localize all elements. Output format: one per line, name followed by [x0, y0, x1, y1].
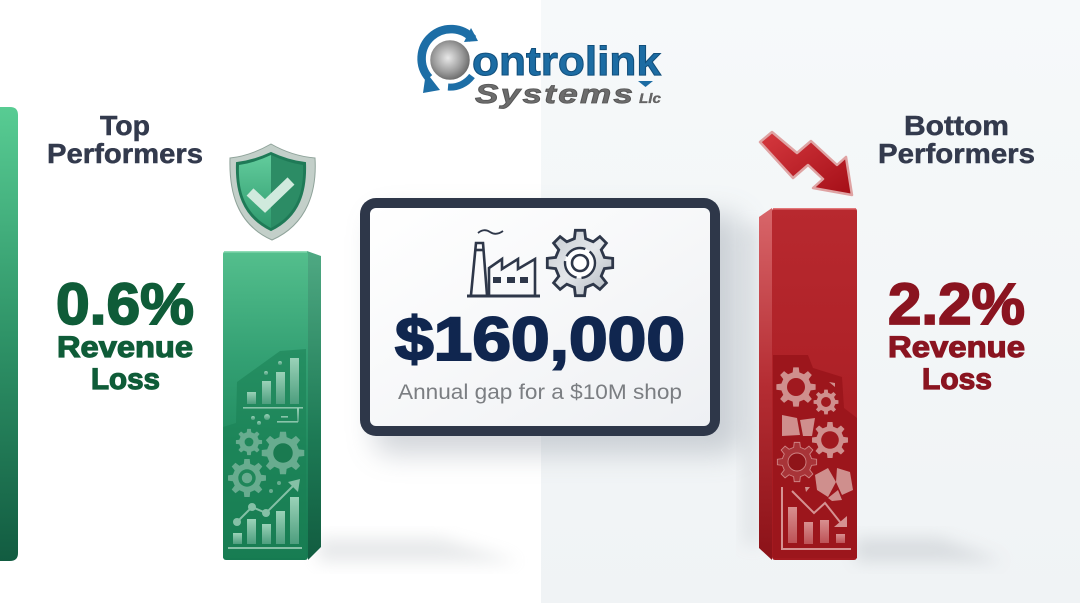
left accent stripe	[0, 107, 18, 561]
stat: 0.6% revenue loss: Loss	[91, 363, 160, 396]
heading: bottom performers	[878, 110, 1035, 169]
icon: gear	[547, 230, 613, 296]
bar front face	[772, 208, 857, 560]
card shadow	[374, 214, 742, 454]
bar side face	[759, 208, 772, 560]
upper bar chart	[243, 358, 303, 425]
bar top highlight	[773, 208, 856, 210]
icon: shield with check	[230, 144, 315, 240]
card face	[370, 208, 710, 426]
stat: 2.2% revenue loss: Revenue	[888, 331, 1025, 364]
embossed panel	[223, 349, 306, 558]
stat: 0.6% revenue loss: 0.6%	[56, 272, 194, 337]
icon: red down arrow	[760, 132, 852, 195]
falling chart	[782, 487, 851, 549]
logo wordmark: ontrolink	[472, 38, 661, 84]
heading: bottom performers: Bottom	[904, 110, 1009, 141]
floor shadow: red bar	[855, 538, 1005, 562]
logo suffix: Llc	[639, 90, 661, 106]
side shadow: red bar	[744, 225, 760, 545]
card frame	[360, 198, 720, 436]
floor shadow: green bar	[318, 538, 520, 562]
center card	[360, 198, 742, 454]
heading: top performers	[47, 110, 203, 169]
stat: 2.2% revenue loss: 2.2%	[888, 272, 1025, 337]
logo subtitle: Systems	[475, 79, 633, 109]
stat: 2.2% revenue loss: Loss	[922, 363, 992, 396]
logo arrow	[638, 81, 653, 87]
background: right half	[541, 0, 1080, 603]
icon: factory	[467, 230, 540, 296]
green bar	[223, 251, 321, 560]
logo ball	[430, 40, 470, 80]
caption: Annual gap for a $10M shop	[398, 381, 682, 404]
stat: 2.2% revenue loss	[888, 272, 1025, 396]
amount: $160,000	[395, 305, 685, 373]
heading: bottom performers: Performers	[878, 138, 1035, 169]
logo: Controlink Systems	[422, 28, 661, 109]
gears	[228, 429, 304, 497]
embossed panel	[773, 355, 857, 558]
broken shards	[782, 382, 853, 501]
gears	[776, 367, 848, 482]
red bar	[759, 208, 857, 560]
stat: 0.6% revenue loss	[56, 272, 194, 396]
bar side face	[307, 251, 321, 560]
bar top highlight	[224, 251, 307, 252]
stat: 0.6% revenue loss: Revenue	[57, 331, 193, 364]
heading: top performers: Top	[100, 110, 150, 141]
logo ring	[422, 28, 478, 93]
background: left half	[0, 0, 541, 603]
heading: top performers: Performers	[47, 138, 203, 169]
bar front face	[223, 251, 308, 560]
rising line chart	[228, 479, 302, 549]
